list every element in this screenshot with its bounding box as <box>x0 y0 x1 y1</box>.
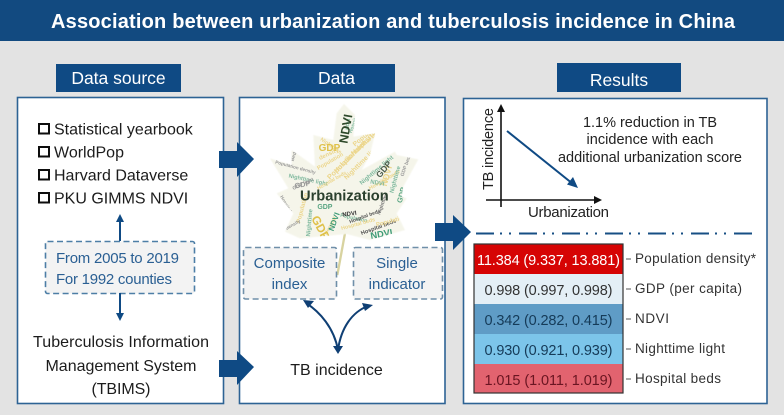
curved arrows: indicators to TB incidence <box>303 300 373 354</box>
source checklist: PKU GIMMS NDVI <box>54 190 188 208</box>
dashed box: period and counties: For 1992 counties <box>56 271 172 288</box>
dashed box: composite index: Composite <box>254 255 325 272</box>
dashed box: composite index <box>244 248 336 299</box>
text: TB incidence: TB incidence <box>290 362 383 379</box>
maple leaf word cloud: NDVI <box>344 118 351 130</box>
maple leaf word cloud: Nighttime <box>319 137 342 156</box>
table row labels: NDVI <box>635 311 669 326</box>
table row labels <box>626 251 757 386</box>
maple leaf word cloud: Beds <box>290 149 299 162</box>
table: odds ratios: 0.930 (0.921, 0.939) <box>484 343 612 359</box>
maple leaf word cloud: NDVI <box>379 165 394 187</box>
table row labels: Hospital beds <box>635 371 721 386</box>
maple leaf word cloud: Population <box>296 192 310 224</box>
table: odds ratios: 0.998 (0.997, 0.998) <box>484 283 612 299</box>
heading: data source: Data source <box>71 68 166 88</box>
arrow: down to TBIMS <box>116 293 124 321</box>
line chart: TB incidence vs urbanization <box>481 104 609 221</box>
heading: results: Results <box>590 70 648 90</box>
maple leaf word cloud: Nighttime light <box>359 155 395 187</box>
maple leaf word cloud: Hospital beds <box>341 217 376 232</box>
dash-dot divider <box>476 232 755 234</box>
table row labels: Population density* <box>635 251 757 266</box>
line chart: TB incidence vs urbanization: TB incidence <box>481 108 497 190</box>
maple leaf word cloud: Hospital beds <box>349 208 382 225</box>
source checklist: Statistical yearbook <box>54 122 194 138</box>
heading: data: Data <box>318 68 355 88</box>
maple leaf word cloud: Population <box>352 121 383 148</box>
keyword: urbanization: Urbanization <box>300 188 389 204</box>
heading: results <box>557 63 681 92</box>
maple leaf word cloud: density <box>318 147 340 162</box>
maple leaf word cloud: NDVI <box>370 179 385 188</box>
source checklist: WorldPop <box>54 144 124 162</box>
arrow: up to sources <box>116 214 124 241</box>
dashed box: period and counties <box>46 242 194 294</box>
source checklist: Harvard Dataverse <box>54 168 188 184</box>
table: odds ratios: 1.015 (1.011, 1.019) <box>484 373 612 389</box>
maple leaf word cloud: GDP <box>294 179 311 190</box>
arrow: data to results <box>435 215 471 250</box>
maple leaf word cloud: Hospital beds <box>351 126 385 157</box>
keyword: NDVI top: NDVI <box>336 113 355 145</box>
maple leaf word cloud: Population <box>340 213 368 224</box>
line chart: TB incidence vs urbanization: Urbanization <box>528 204 609 221</box>
maple leaf word cloud: Hospital beds <box>360 219 397 237</box>
maple leaf word cloud: Nighttime light <box>288 173 328 188</box>
maple leaf word cloud: Population density <box>376 209 430 229</box>
maple leaf word cloud: density <box>285 218 302 231</box>
text: TBIMS: (TBIMS) <box>92 381 150 398</box>
heading: data <box>278 64 395 92</box>
maple leaf word cloud: Nighttime <box>306 208 314 237</box>
maple leaf word cloud: Hospital <box>323 215 339 236</box>
maple leaf word cloud: Hospital beds <box>368 169 401 192</box>
table: odds ratios: 0.342 (0.282, 0.415) <box>484 313 612 329</box>
panel: data source <box>18 98 224 404</box>
keyword: NDVI green: NDVI <box>370 227 393 241</box>
maple leaf word cloud: Hospital <box>279 195 293 213</box>
title banner: Association between urbanization and tuberculosis incidence in China <box>51 11 736 33</box>
finding text <box>558 115 742 166</box>
keyword: NDVI center: NDVI <box>342 211 357 219</box>
dashed box: composite index: index <box>272 276 308 293</box>
keyword: GDP lower left: GDP <box>308 213 333 243</box>
maple leaf word cloud: GDP beds <box>400 153 413 177</box>
finding text: 1.1% reduction in TB <box>583 115 717 131</box>
arrow: data source to data (top) <box>219 142 254 177</box>
maple leaf word cloud: Hospital beds <box>333 139 369 175</box>
table: odds ratios: 11.384 (9.337, 13.881) <box>477 253 620 269</box>
dashed box: single indicator <box>354 248 442 299</box>
text: TBIMS: Management System <box>46 358 196 375</box>
table row labels: GDP (per capita) <box>635 281 742 296</box>
maple leaf word cloud: Hospital <box>348 113 360 134</box>
finding text: additional urbanization score <box>558 150 742 166</box>
text: TBIMS: Tuberculosis Information <box>33 334 209 351</box>
panel: results <box>464 98 767 404</box>
keyword: GDP yellow: GDP <box>319 143 341 154</box>
arrow: TBIMS to TB incidence <box>219 351 254 385</box>
title banner <box>0 0 784 41</box>
finding text: incidence with each <box>586 132 714 148</box>
maple leaf word cloud: Population density <box>275 159 317 175</box>
maple leaf word cloud: Nighttime light <box>343 143 382 181</box>
dashed box: period and counties: From 2005 to 2019 <box>56 250 179 267</box>
maple leaf word cloud: GDP light <box>292 177 315 192</box>
maple leaf word cloud: Population <box>316 152 345 172</box>
maple leaf word cloud: Population density <box>325 128 378 181</box>
maple leaf word cloud: Nighttime <box>389 165 403 194</box>
table row labels: Nighttime light <box>635 341 725 356</box>
keyword: GDP far right: GDP <box>395 186 408 204</box>
table: odds ratios <box>474 244 623 393</box>
panel: data <box>240 98 445 404</box>
maple leaf word cloud: Nighttime <box>376 192 390 216</box>
keyword: NDVI lower: NDVI <box>327 211 342 232</box>
maple leaf word cloud <box>270 104 430 275</box>
heading: data source <box>56 64 181 92</box>
text: TBIMS <box>33 334 209 398</box>
keyword: GDP right: GDP <box>374 159 394 180</box>
source checklist <box>39 122 194 208</box>
keyword: GDP green: GDP <box>317 204 333 211</box>
dashed box: single indicator: Single <box>376 255 418 272</box>
maple leaf word cloud: Hospital beds <box>316 170 348 192</box>
dashed box: single indicator: indicator <box>369 276 425 293</box>
